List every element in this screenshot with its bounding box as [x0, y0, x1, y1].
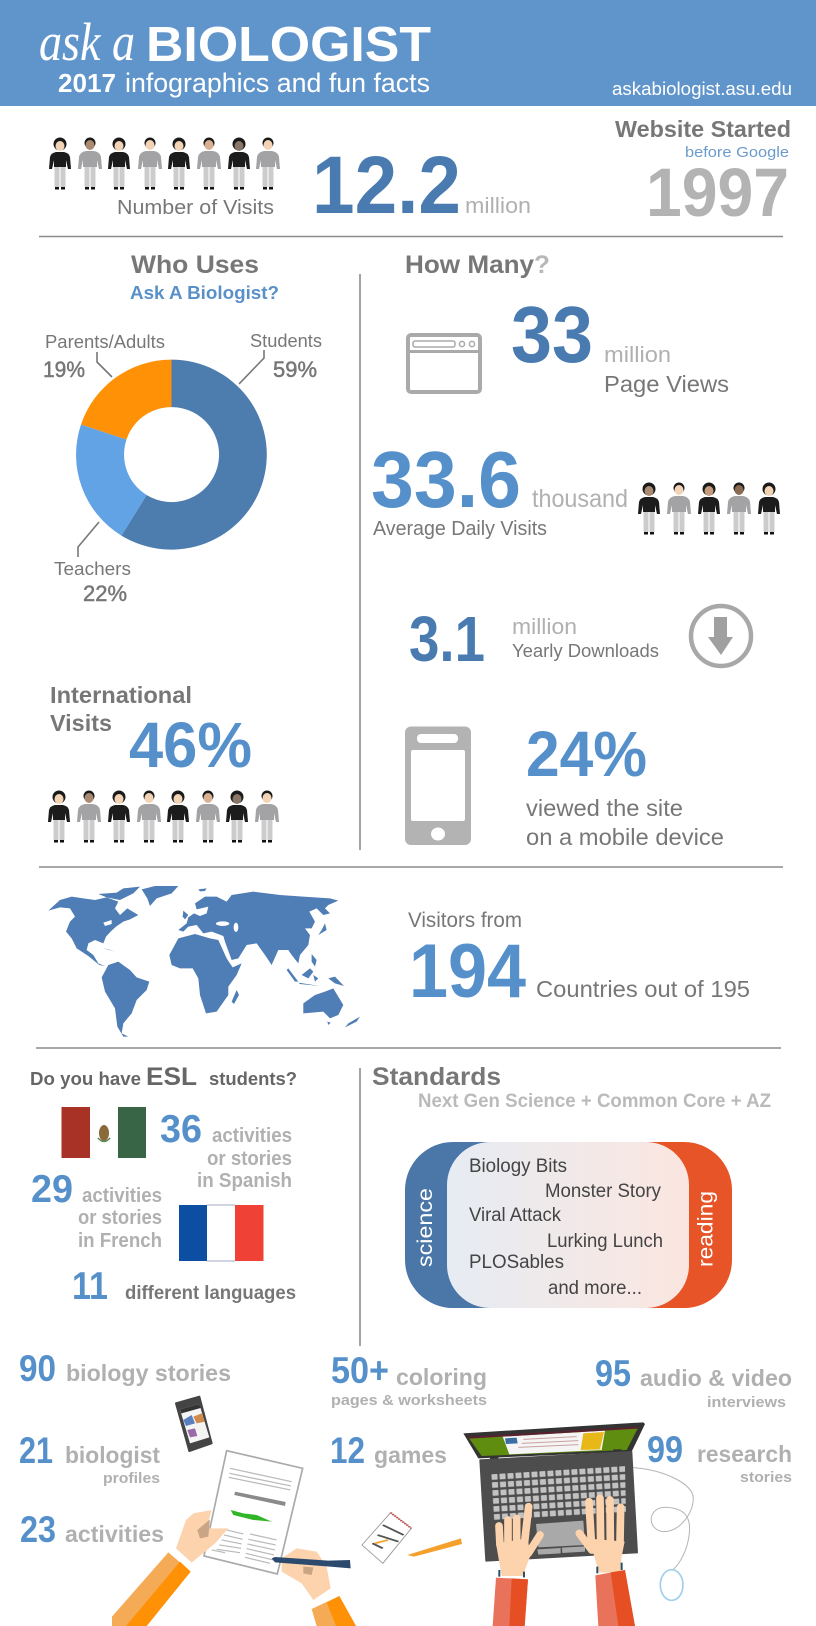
international visits: 46%: [129, 709, 252, 781]
heading: standards: Standards: [372, 1063, 501, 1091]
stat: biologist profiles: biologist: [65, 1442, 160, 1468]
stat: research stories: research: [697, 1441, 792, 1467]
label: students: [239, 331, 322, 384]
stat: games: [330, 1430, 447, 1471]
stat: average daily visits: 33.6: [371, 435, 521, 524]
heading: ESL students: students?: [209, 1069, 297, 1089]
stat: mobile share: [526, 718, 724, 850]
stat: visitors from 194 countries: Visitors from: [408, 909, 522, 932]
flag: France: [179, 1205, 264, 1261]
international visits: Visits: [50, 710, 112, 736]
stat: biology stories: [19, 1348, 231, 1389]
stat: activities: [20, 1509, 164, 1550]
title: ask a BIOLOGIST: BIOLOGIST: [146, 18, 431, 72]
stat: page views: Page Views: [604, 371, 729, 397]
stat: coloring pages: [331, 1350, 487, 1409]
stat: page views: 33: [511, 290, 593, 379]
stat: Spanish activities: or stories: [207, 1148, 292, 1170]
label: teachers: [54, 522, 131, 606]
stat: average daily visits: Average Daily Visits: [373, 518, 547, 540]
heading: who uses: Who Uses: [131, 251, 259, 279]
stat: coloring pages: pages & worksheets: [331, 1392, 487, 1409]
heading: ESL students: [30, 1063, 297, 1091]
stat: biologist profiles: [19, 1430, 160, 1487]
stat: Spanish activities: in Spanish: [197, 1170, 292, 1192]
stat: mobile share: 24%: [526, 718, 647, 790]
heading: ESL students: Do you have: [30, 1069, 141, 1089]
label: science: science: [414, 1188, 437, 1267]
stat: biology stories: 90: [19, 1348, 56, 1389]
stat: French activities: [31, 1168, 162, 1252]
stat: mobile share: viewed the site: [526, 795, 683, 821]
pen: [272, 1557, 351, 1568]
stat: French activities: 29: [31, 1168, 73, 1211]
stat: French activities: or stories: [78, 1207, 162, 1229]
stat: languages: different languages: [125, 1283, 296, 1304]
stat: Spanish activities: [160, 1108, 292, 1192]
slice: teachers 22%: [76, 424, 147, 536]
stat: coloring pages: coloring: [396, 1364, 487, 1390]
touchpad: [536, 1521, 585, 1547]
number of visits people icons: [49, 138, 280, 190]
resource list: PLOSables: [469, 1252, 564, 1273]
heading: who uses: Ask A Biologist?: [130, 283, 279, 303]
heading: standards: [372, 1063, 771, 1112]
stat: coloring pages: 50+: [331, 1350, 389, 1391]
stat: average daily visits: [371, 435, 628, 540]
illustration: hands with paper: [112, 1451, 356, 1626]
daily visits people icons: [638, 482, 780, 534]
icon: mobile device: [405, 726, 471, 845]
stat: biology stories: biology stories: [66, 1360, 231, 1386]
mouse cable: [633, 1468, 693, 1570]
header banner: [0, 0, 816, 106]
stat: Spanish activities: 36: [160, 1108, 202, 1151]
stat: activities: activities: [65, 1521, 164, 1547]
label: students: 59%: [273, 357, 317, 382]
resource list: Biology Bits: [469, 1156, 567, 1177]
stat: yearly downloads: Yearly Downloads: [512, 641, 659, 661]
stat: games: 12: [330, 1430, 365, 1471]
icon: smartphone: [176, 1397, 212, 1451]
stat: audio and video: [595, 1353, 792, 1411]
resource list: Lurking Lunch: [547, 1231, 663, 1252]
stat: mobile share: on a mobile device: [526, 824, 724, 850]
stat: average daily visits: thousand: [532, 485, 628, 513]
right hand: [282, 1548, 331, 1600]
subtitle: infographics and fun facts: [125, 68, 430, 98]
stat: activities: 23: [20, 1509, 56, 1550]
stat: research stories: stories: [740, 1469, 792, 1486]
left laptop arm: [493, 1578, 528, 1626]
international visits people icons: [48, 790, 279, 842]
visits figure: million: [465, 193, 531, 218]
label: parents: 19%: [43, 357, 85, 382]
stat: games: games: [374, 1442, 447, 1468]
left hand: [176, 1510, 228, 1563]
keyboard: [491, 1465, 626, 1522]
world map: [48, 886, 360, 1037]
resource list: Viral Attack: [469, 1205, 561, 1226]
international visits: [50, 682, 252, 781]
label: parents: Parents/Adults: [45, 332, 165, 352]
stat: visitors from 194 countries: 194: [409, 929, 526, 1014]
stat: languages: 11: [72, 1265, 108, 1308]
stat: page views: million: [604, 342, 671, 367]
number of visits label: Number of Visits: [117, 197, 274, 219]
donut chart: [76, 360, 267, 550]
label: students: Students: [250, 331, 322, 351]
stat: research stories: 99: [647, 1429, 683, 1470]
label: teachers: Teachers: [54, 559, 131, 579]
stat: visitors from 194 countries: [408, 909, 750, 1014]
stat: yearly downloads: 3.1: [409, 603, 485, 675]
mouse: [660, 1570, 683, 1600]
illustration: laptop with hands and mouse: [463, 1422, 693, 1626]
stat: audio and video: audio & video: [640, 1365, 792, 1391]
stat: audio and video: interviews: [707, 1394, 786, 1411]
heading: ESL students: ESL: [146, 1063, 197, 1091]
standards venn diagram: [405, 1142, 732, 1308]
icon: download arrow: [691, 606, 751, 666]
slice: parents 19%: [81, 360, 172, 440]
resource list: Monster Story: [545, 1181, 661, 1202]
subtitle: 2017: [58, 68, 116, 98]
heading: standards: Next Gen Science + Common Core + AZ: [418, 1091, 771, 1112]
website started: before Google: [685, 144, 789, 161]
laptop base: [480, 1452, 637, 1561]
stat: French activities: in French: [78, 1230, 162, 1252]
website started: 1997: [646, 154, 789, 231]
stat: languages: [72, 1265, 296, 1308]
stat: visitors from 194 countries: Countries out of 195: [536, 976, 750, 1002]
stat: French activities: activities: [82, 1185, 162, 1207]
right laptop hand: [579, 1498, 625, 1573]
website started: Website Started: [615, 116, 791, 142]
title: ask a BIOLOGIST: [39, 12, 431, 72]
stat: page views: [511, 290, 729, 397]
left arm: [112, 1552, 191, 1626]
stat: yearly downloads: million: [512, 614, 577, 639]
label: teachers: 22%: [83, 581, 127, 606]
label: parents: [43, 332, 165, 382]
visits figure: 12.2: [312, 140, 461, 231]
right arm: [312, 1596, 356, 1626]
right laptop arm: [595, 1570, 635, 1626]
international visits: International: [50, 682, 192, 708]
flag: Mexico: [62, 1107, 146, 1158]
slice: students 59%: [121, 360, 267, 550]
website url: askabiologist.asu.edu: [612, 79, 792, 99]
stat: yearly downloads: [409, 603, 659, 675]
resource list: and more...: [548, 1278, 642, 1299]
laptop screen: [463, 1422, 645, 1458]
heading: who uses: [130, 251, 279, 303]
label: reading: reading: [694, 1191, 718, 1267]
left laptop hand: [496, 1507, 540, 1576]
stat: audio and video: 95: [595, 1353, 631, 1394]
heading: how many: How Many?: [405, 251, 550, 279]
icon: browser window: [408, 335, 480, 392]
icon: notepad and pencil: [362, 1513, 462, 1563]
stat: Spanish activities: activities: [212, 1125, 292, 1147]
stat: biologist profiles: profiles: [103, 1470, 160, 1487]
title: ask a BIOLOGIST: ask a: [39, 12, 135, 72]
paper: [204, 1451, 303, 1574]
stat: research stories: [647, 1429, 792, 1486]
website started: [615, 116, 791, 231]
resource list: [469, 1156, 663, 1299]
stat: biologist profiles: 21: [19, 1430, 53, 1471]
